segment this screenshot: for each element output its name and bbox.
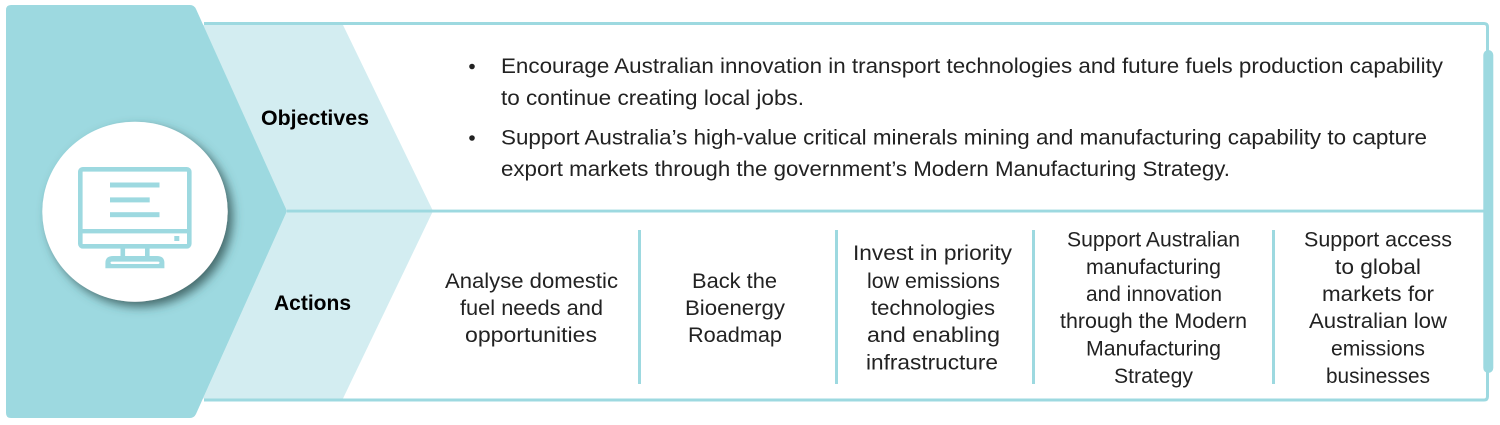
action 2: Bioenergy (685, 297, 786, 320)
action 5 (1304, 228, 1452, 388)
action 4: Support Australian (1067, 228, 1240, 252)
panel frame (204, 24, 1488, 400)
action 5: to global (1335, 256, 1421, 279)
heading: Actions: Actions (274, 292, 351, 315)
objectives text block: Encourage Australian innovation in transport technologies and future fuels production capability (501, 55, 1444, 78)
right accent bar (1483, 50, 1493, 373)
action 3 (853, 242, 1013, 374)
action 3: and enabling (867, 324, 1000, 347)
action 1: fuel needs and (460, 297, 603, 320)
action 1: opportunities (465, 324, 597, 347)
action 4: Manufacturing (1086, 338, 1221, 360)
row divider (287, 210, 1485, 212)
objectives text block (469, 55, 1444, 181)
action 5: Support access (1304, 228, 1452, 252)
action 3: infrastructure (866, 352, 998, 374)
actions chevron (203, 211, 433, 398)
action 3: technologies (871, 297, 995, 320)
objectives text block: export markets through the government’s Modern Manufacturing Strategy. (501, 158, 1230, 181)
action 3: Invest in priority (853, 242, 1013, 265)
objectives text block: to continue creating local jobs. (501, 87, 804, 110)
action 5: businesses (1326, 365, 1430, 388)
action 2: Roadmap (688, 324, 782, 347)
action 2 (685, 270, 786, 347)
objectives chevron (203, 25, 433, 211)
action 4 (1060, 228, 1247, 388)
action 3: low emissions (867, 270, 1000, 293)
action dividers (638, 230, 1275, 384)
heading: Objectives: Objectives (261, 107, 369, 130)
action 4: through the Modern (1060, 310, 1247, 333)
icon: computer monitor (42, 122, 228, 302)
action 2: Back the (692, 270, 777, 293)
action 4: and innovation (1086, 283, 1222, 306)
objectives text block: Support Australia’s high-value critical minerals mining and manufacturing capability to capture (501, 126, 1427, 150)
action 4: manufacturing (1086, 256, 1221, 279)
action 1: Analyse domestic (445, 270, 618, 293)
action 4: Strategy (1114, 365, 1193, 388)
action 1 (445, 270, 618, 347)
action 5: Australian low (1309, 310, 1448, 333)
left hexagon panel (6, 5, 287, 418)
action 5: markets for (1322, 283, 1434, 306)
action 5: emissions (1331, 338, 1425, 360)
